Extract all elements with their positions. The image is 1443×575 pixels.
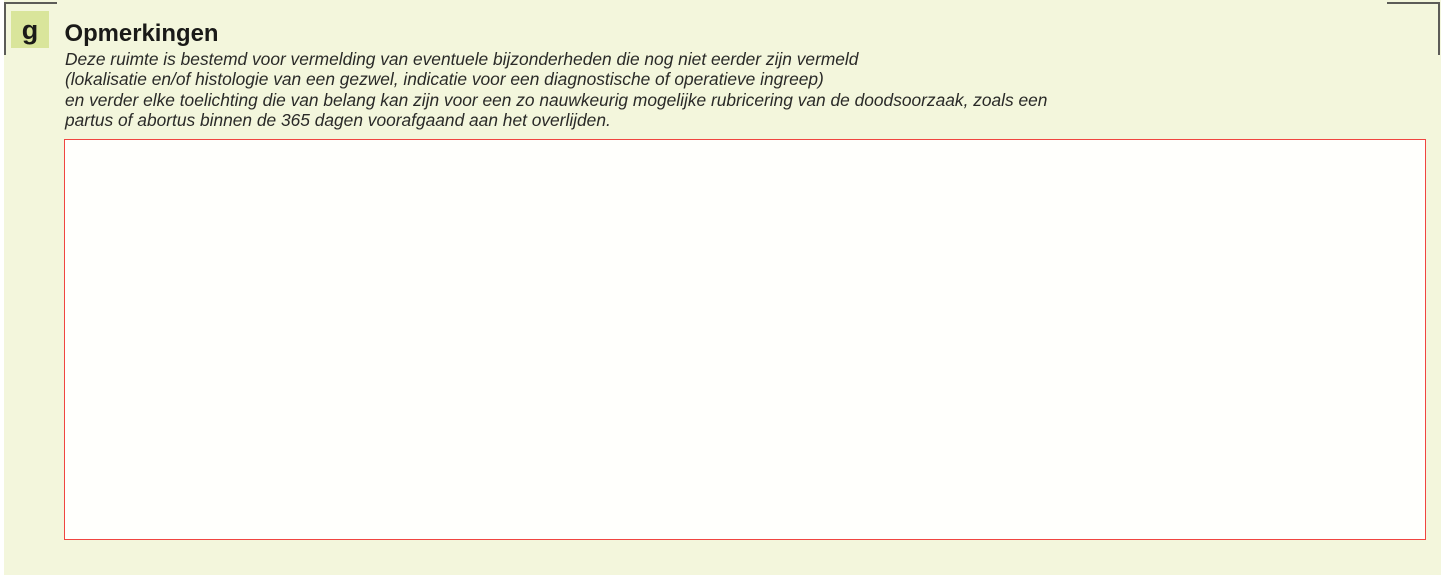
instruction text block: partus of abortus binnen de 365 dagen voorafgaand aan het overlijden. <box>65 110 611 130</box>
instruction text block: en verder elke toelichting die van belang kan zijn voor een zo nauwkeurig mogelijke rubricering van de doodsoorzaak, zoals een <box>65 90 1047 110</box>
section letter badge: g <box>22 15 38 45</box>
heading: Opmerkingen <box>64 20 218 47</box>
instruction text block: Deze ruimte is bestemd voor vermelding van eventuele bijzonderheden die nog niet eerder zijn vermeld <box>65 49 858 69</box>
section letter badge <box>11 11 49 48</box>
instruction text block <box>64 49 1047 130</box>
crop mark: top right <box>1387 2 1440 55</box>
instruction text block: (lokalisatie en/of histologie van een gezwel, indicatie voor een diagnostische of operatieve ingreep) <box>65 69 824 89</box>
empty remarks input box <box>64 139 1426 540</box>
crop mark: top left <box>4 2 57 55</box>
